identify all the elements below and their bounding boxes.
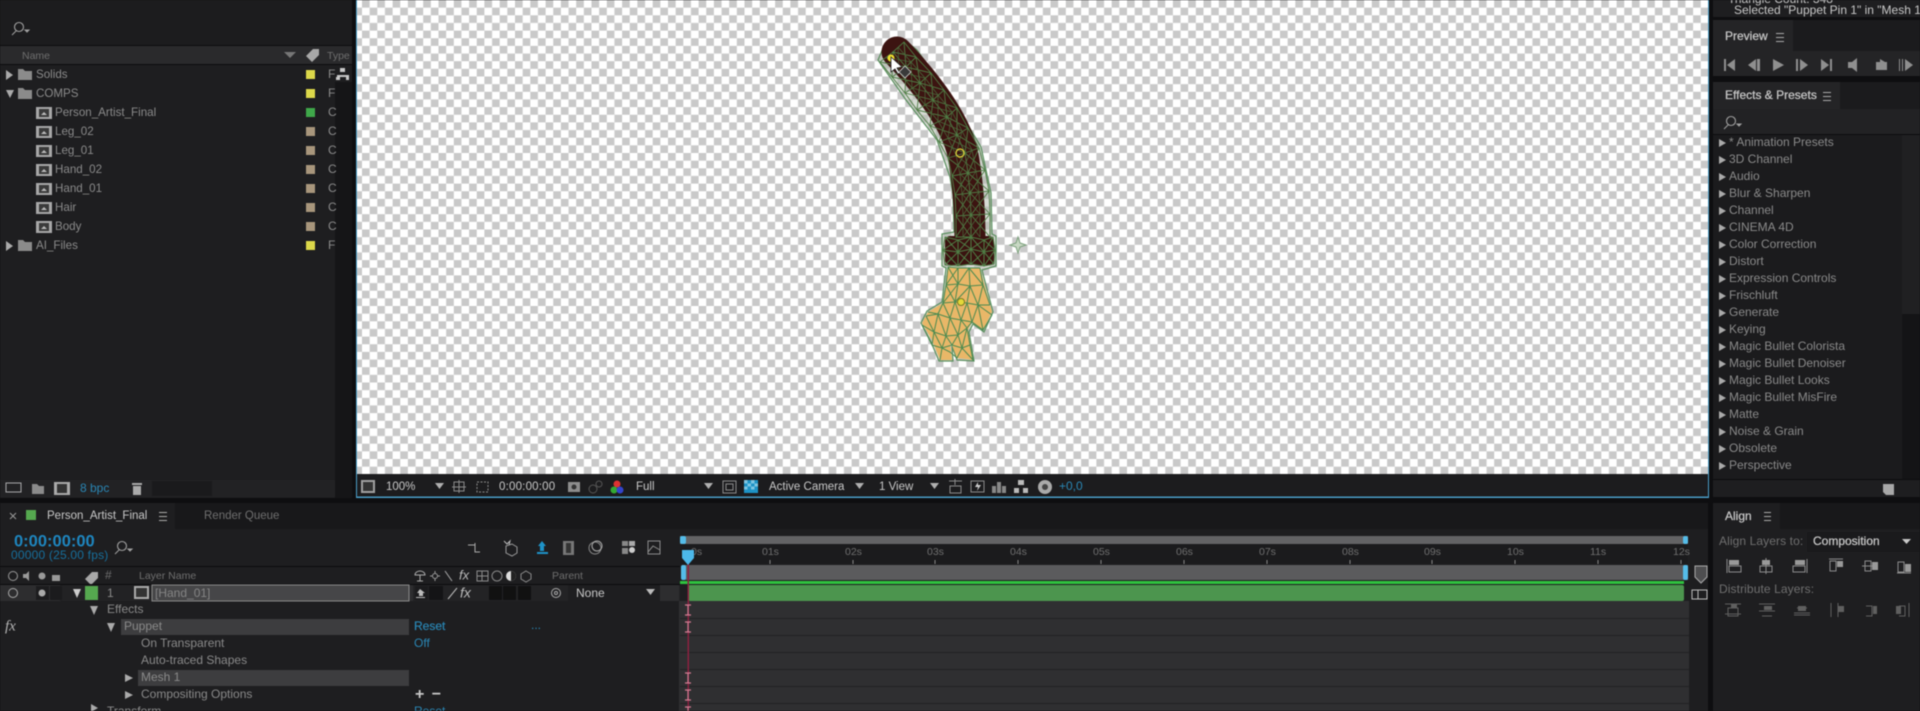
puppet pins bbox=[888, 54, 894, 62]
project file list: F bbox=[328, 86, 335, 100]
preview controls bbox=[1724, 58, 1913, 72]
time ruler: 10s bbox=[1507, 546, 1524, 558]
sleeve fine mesh bbox=[886, 47, 980, 237]
project file list: Hand_01 bbox=[55, 182, 102, 195]
navigator bar bbox=[680, 536, 1688, 544]
time ruler: 08s bbox=[1342, 546, 1359, 558]
project file list: C bbox=[328, 200, 337, 214]
effects list: Color Correction bbox=[1729, 237, 1816, 251]
panel: align: Align bbox=[1725, 509, 1752, 523]
viewer toolbar: Full bbox=[636, 481, 655, 493]
project file list: Leg_01 bbox=[55, 144, 94, 157]
time ruler bbox=[680, 544, 1690, 564]
icon: timeline search bbox=[115, 542, 132, 554]
timeline tabs: Person_Artist_Final bbox=[47, 510, 147, 522]
icon: project search bbox=[12, 22, 29, 35]
project file list: F bbox=[328, 67, 335, 81]
project file list: F bbox=[328, 238, 335, 252]
effects list: Distort bbox=[1729, 254, 1764, 268]
effects list bbox=[1719, 135, 1846, 472]
sleeve bbox=[897, 52, 970, 240]
effects list: CINEMA 4D bbox=[1729, 220, 1794, 234]
effects list: Expression Controls bbox=[1729, 271, 1836, 285]
panel: effects and presets: Effects & Presets bbox=[1725, 88, 1817, 102]
effects list: Generate bbox=[1729, 305, 1779, 319]
effects list: Noise & Grain bbox=[1729, 424, 1804, 438]
layer column headers: # bbox=[105, 568, 112, 582]
time ruler: 0s bbox=[691, 546, 702, 558]
layer properties: On Transparent bbox=[141, 636, 225, 650]
distribute icons bbox=[1725, 603, 1909, 617]
time ruler: 09s bbox=[1424, 546, 1441, 558]
layer properties: Auto-traced Shapes bbox=[141, 653, 247, 667]
time ruler: 05s bbox=[1093, 546, 1110, 558]
layer row: Hand_01 bbox=[0, 585, 680, 601]
effects list: Magic Bullet Denoiser bbox=[1729, 356, 1846, 370]
time ruler: 03s bbox=[927, 546, 944, 558]
time ruler: 12s bbox=[1673, 546, 1690, 558]
effects list: Frischluft bbox=[1729, 288, 1778, 302]
icon: timeline end marker bbox=[1695, 566, 1707, 583]
time ruler: 04s bbox=[1010, 546, 1027, 558]
anchor target bbox=[1010, 237, 1026, 253]
layer properties bbox=[5, 602, 541, 711]
project column header bbox=[0, 45, 352, 65]
effects list: Channel bbox=[1729, 203, 1774, 217]
icon: cursor bbox=[891, 57, 902, 74]
time ruler: 11s bbox=[1590, 546, 1606, 558]
puppet arm with mesh bbox=[878, 41, 1026, 361]
project file list: Person_Artist_Final bbox=[55, 106, 156, 119]
layer properties: Off bbox=[414, 636, 430, 650]
layer row: Hand_01: 1 bbox=[107, 586, 114, 600]
panel: align: Composition bbox=[1813, 534, 1880, 548]
effects list: Magic Bullet MisFire bbox=[1729, 390, 1837, 404]
timeline tracks bbox=[660, 529, 1708, 711]
icon: pin tool cursor bbox=[899, 66, 911, 78]
mesh outer outline bbox=[878, 41, 996, 361]
align icons bbox=[1727, 558, 1911, 574]
viewer toolbar: +0,0 bbox=[1059, 479, 1083, 493]
sleeve triangle mesh bbox=[880, 42, 990, 237]
layer properties: Compositing Options bbox=[141, 687, 252, 701]
effects list: Magic Bullet Looks bbox=[1729, 373, 1830, 387]
icon: comp flowchart button bbox=[1692, 590, 1707, 599]
effects list: Magic Bullet Colorista bbox=[1729, 339, 1845, 353]
cuff mesh bbox=[943, 237, 995, 266]
project file list: Body bbox=[55, 220, 82, 233]
panel: project bbox=[0, 0, 352, 498]
project column header: Type bbox=[327, 50, 350, 62]
effects list: Matte bbox=[1729, 407, 1759, 421]
layer properties: fx bbox=[5, 618, 16, 634]
icon: effects search bbox=[1724, 116, 1741, 129]
viewer toolbar: 1 View bbox=[879, 481, 914, 493]
effects footer bbox=[1713, 479, 1920, 497]
panel: align: Align Layers to: bbox=[1719, 534, 1803, 548]
project file list: C bbox=[328, 105, 337, 119]
time ruler: 07s bbox=[1259, 546, 1276, 558]
panel: align bbox=[1713, 503, 1920, 711]
layer properties: Puppet bbox=[124, 619, 163, 633]
project column header: Name bbox=[22, 50, 50, 62]
layer properties: ... bbox=[531, 618, 541, 632]
effects list: Blur & Sharpen bbox=[1729, 186, 1810, 200]
timeline tabs: Render Queue bbox=[204, 510, 279, 522]
viewer toolbar: 0:00:00:00 bbox=[499, 481, 555, 493]
time ruler: 01s bbox=[762, 546, 779, 558]
project file list: C bbox=[328, 124, 337, 138]
layer row: Hand_01: None bbox=[576, 586, 605, 600]
range handles bbox=[680, 536, 1688, 580]
panel: info: Selected "Puppet Pin 1" in "Mesh 1" bbox=[1734, 3, 1920, 17]
layer column headers: Parent bbox=[552, 570, 583, 582]
hand bbox=[922, 267, 992, 360]
effects list: Perspective bbox=[1729, 458, 1792, 472]
cuff bbox=[945, 236, 994, 265]
project footer bbox=[0, 480, 335, 497]
layer row: Hand_01: fx bbox=[460, 585, 472, 601]
effects list: 3D Channel bbox=[1729, 152, 1792, 166]
effects list: Audio bbox=[1729, 169, 1760, 183]
project file list: C bbox=[328, 162, 337, 176]
viewer toolbar bbox=[356, 474, 1709, 498]
project file list: C bbox=[328, 219, 337, 233]
layer properties: + − bbox=[415, 686, 443, 703]
project file list bbox=[6, 67, 349, 252]
time ruler: 02s bbox=[845, 546, 862, 558]
layer column headers: fx bbox=[459, 567, 470, 582]
timeline switches toolbar bbox=[468, 541, 660, 556]
panel: align: Distribute Layers: bbox=[1719, 582, 1814, 596]
panel: preview bbox=[1713, 20, 1920, 76]
transparency checkerboard bbox=[357, 0, 1708, 474]
panel: preview: Preview bbox=[1725, 29, 1768, 43]
viewer toolbar: 100% bbox=[386, 481, 415, 493]
time ruler: 06s bbox=[1176, 546, 1193, 558]
current time display bbox=[11, 532, 108, 562]
timeline tabs bbox=[10, 510, 279, 522]
effects list: Keying bbox=[1729, 322, 1766, 336]
project footer: 8 bpc bbox=[80, 481, 109, 495]
project file list: Hand_02 bbox=[55, 163, 102, 176]
layer properties: Effects bbox=[107, 602, 143, 616]
viewer toolbar: Active Camera bbox=[769, 481, 845, 493]
property keyframe markers bbox=[685, 605, 691, 711]
layer duration bar bbox=[660, 581, 1684, 601]
project file list: Leg_02 bbox=[55, 125, 94, 138]
project file list: C bbox=[328, 143, 337, 157]
hand mesh bbox=[922, 267, 992, 360]
effects list: Obsolete bbox=[1729, 441, 1777, 455]
current time display: 00000 (25.00 fps) bbox=[11, 548, 108, 562]
project file list: C bbox=[328, 181, 337, 195]
current time display: 0:00:00:00 bbox=[14, 532, 95, 550]
layer properties: Reset bbox=[414, 619, 446, 633]
panel: effects and presets bbox=[1713, 82, 1920, 497]
current time indicator bbox=[682, 550, 694, 711]
panel: timeline bbox=[0, 503, 1708, 711]
layer row: Hand_01: [Hand_01] bbox=[155, 586, 210, 600]
project file list: Solids bbox=[36, 68, 68, 81]
layer column headers: Layer Name bbox=[139, 570, 196, 582]
project file list: AI_Files bbox=[36, 239, 78, 252]
layer properties: Mesh 1 bbox=[141, 670, 181, 684]
effects list: * Animation Presets bbox=[1729, 135, 1834, 149]
project file list: COMPS bbox=[36, 87, 79, 100]
panel: composition viewer bbox=[356, 0, 1709, 498]
project file list: Hair bbox=[55, 201, 76, 214]
work area bar bbox=[682, 565, 1688, 580]
layer column headers bbox=[8, 567, 583, 585]
